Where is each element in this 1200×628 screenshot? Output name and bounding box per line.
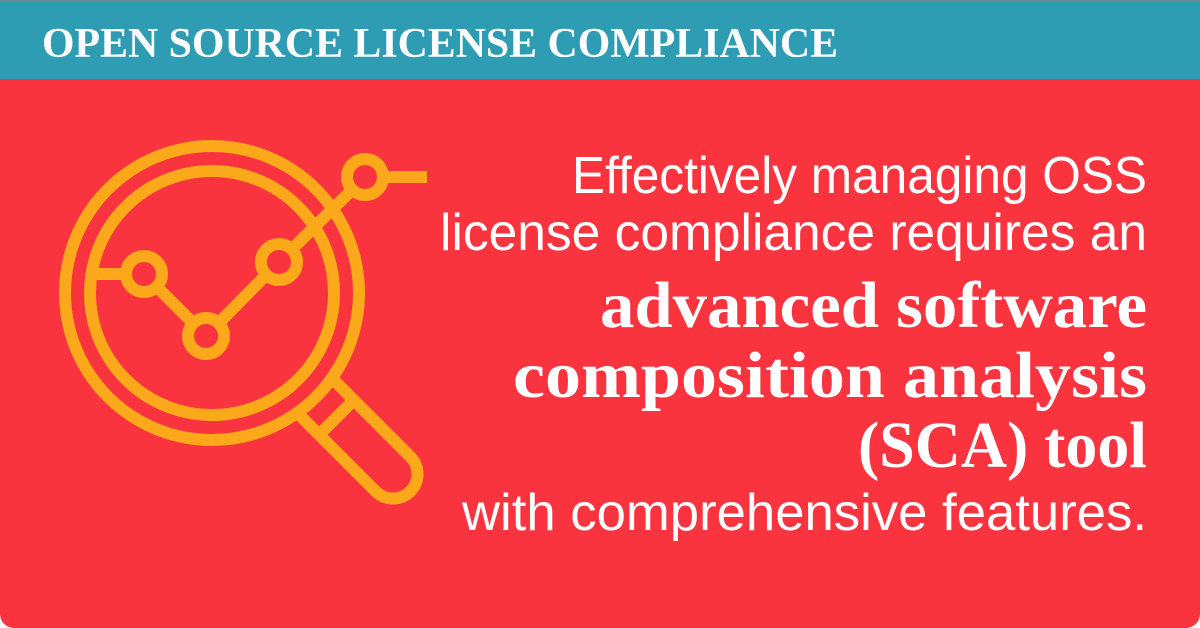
header title: OPEN SOURCE LICENSE COMPLIANCE — [42, 21, 838, 67]
text block: main message: license compliance requires an — [440, 204, 1147, 262]
text block: main message: advanced software — [600, 269, 1147, 342]
text block: main message: composition analysis — [513, 339, 1147, 412]
header band — [0, 0, 1200, 79]
text block: main message: (SCA) tool — [858, 409, 1147, 482]
icon: magnifying glass with line chart — [65, 146, 428, 509]
text block: main message: Effectively managing OSS — [572, 147, 1147, 205]
text block: main message — [440, 147, 1147, 542]
text block: main message: with comprehensive features. — [461, 484, 1147, 542]
